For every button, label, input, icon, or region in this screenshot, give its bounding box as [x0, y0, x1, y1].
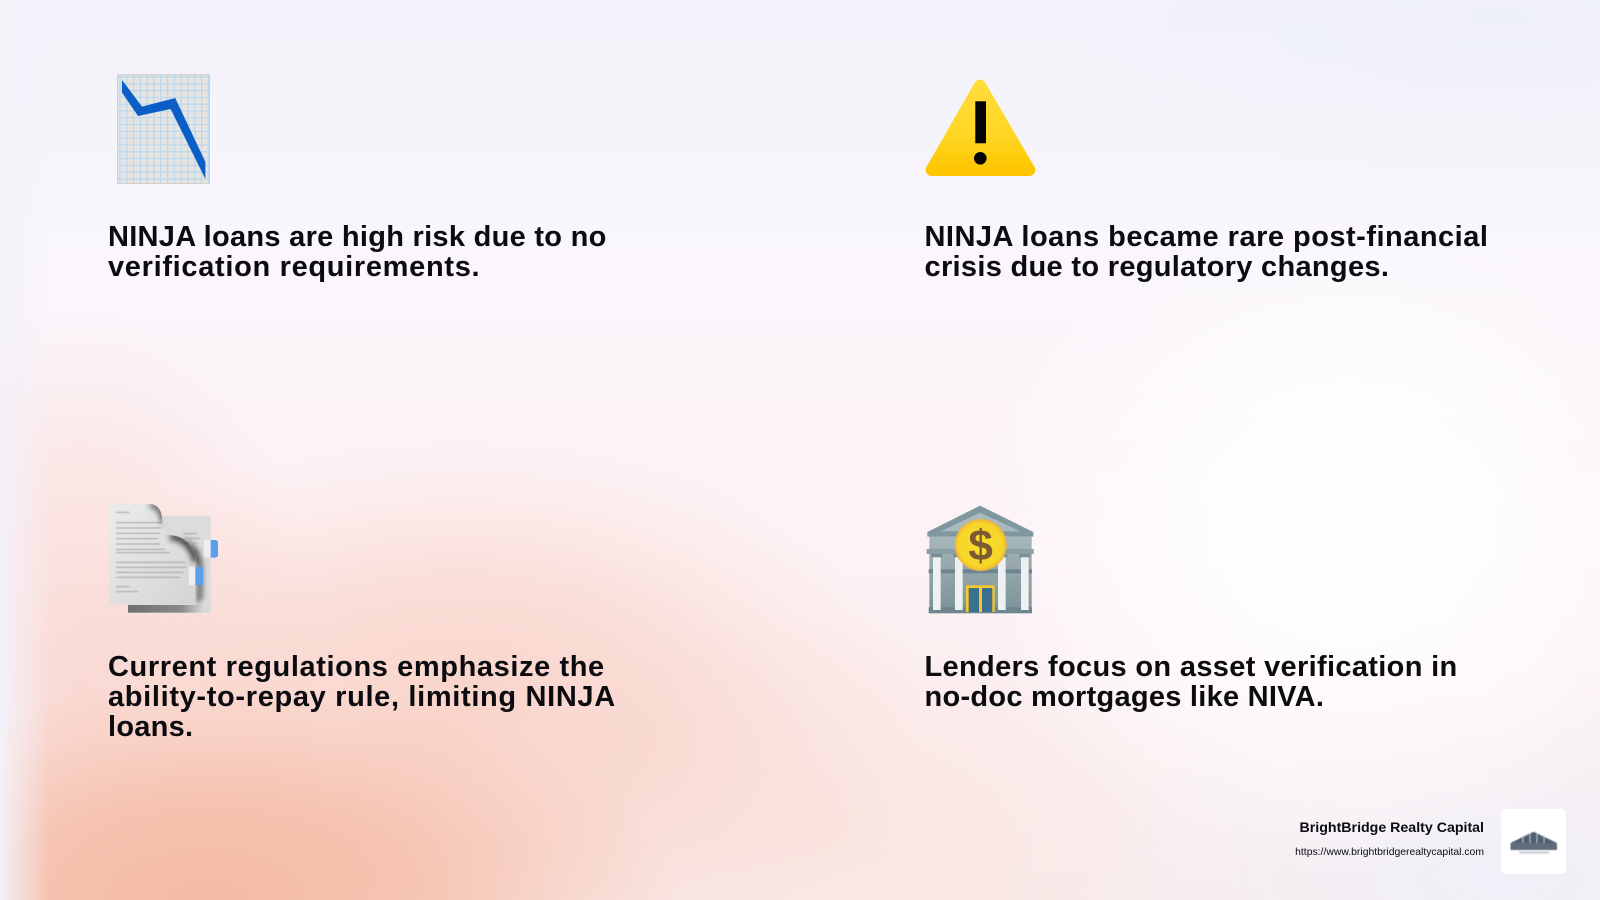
website url: https://www.brightbridgerealtycapital.com — [1295, 847, 1484, 858]
heading: high risk — [108, 221, 607, 283]
icon: documents — [109, 504, 218, 613]
heading: high risk: NINJA loans are high risk due to no — [108, 221, 607, 253]
icon: bank: $ — [968, 522, 993, 571]
heading: rare post-crisis: crisis due to regulatory changes. — [924, 251, 1389, 283]
heading: ability to repay — [108, 651, 616, 743]
heading: asset verification: no-doc mortgages like NIVA. — [924, 681, 1324, 713]
footer brand — [1295, 809, 1566, 874]
heading: rare post-crisis: NINJA loans became rare post-financial — [924, 221, 1488, 253]
heading: ability to repay: ability-to-repay rule, limiting NINJA — [108, 681, 616, 713]
heading: high risk: verification requirements. — [108, 251, 480, 283]
heading: rare post-crisis — [924, 221, 1488, 283]
heading: ability to repay: loans. — [108, 711, 193, 743]
heading: ability to repay: Current regulations emphasize the — [108, 651, 605, 683]
heading: asset verification: Lenders focus on asset verification in — [924, 651, 1458, 683]
brand name: BrightBridge Realty Capital — [1300, 820, 1484, 836]
heading: asset verification — [924, 651, 1458, 713]
logo — [1501, 809, 1566, 874]
